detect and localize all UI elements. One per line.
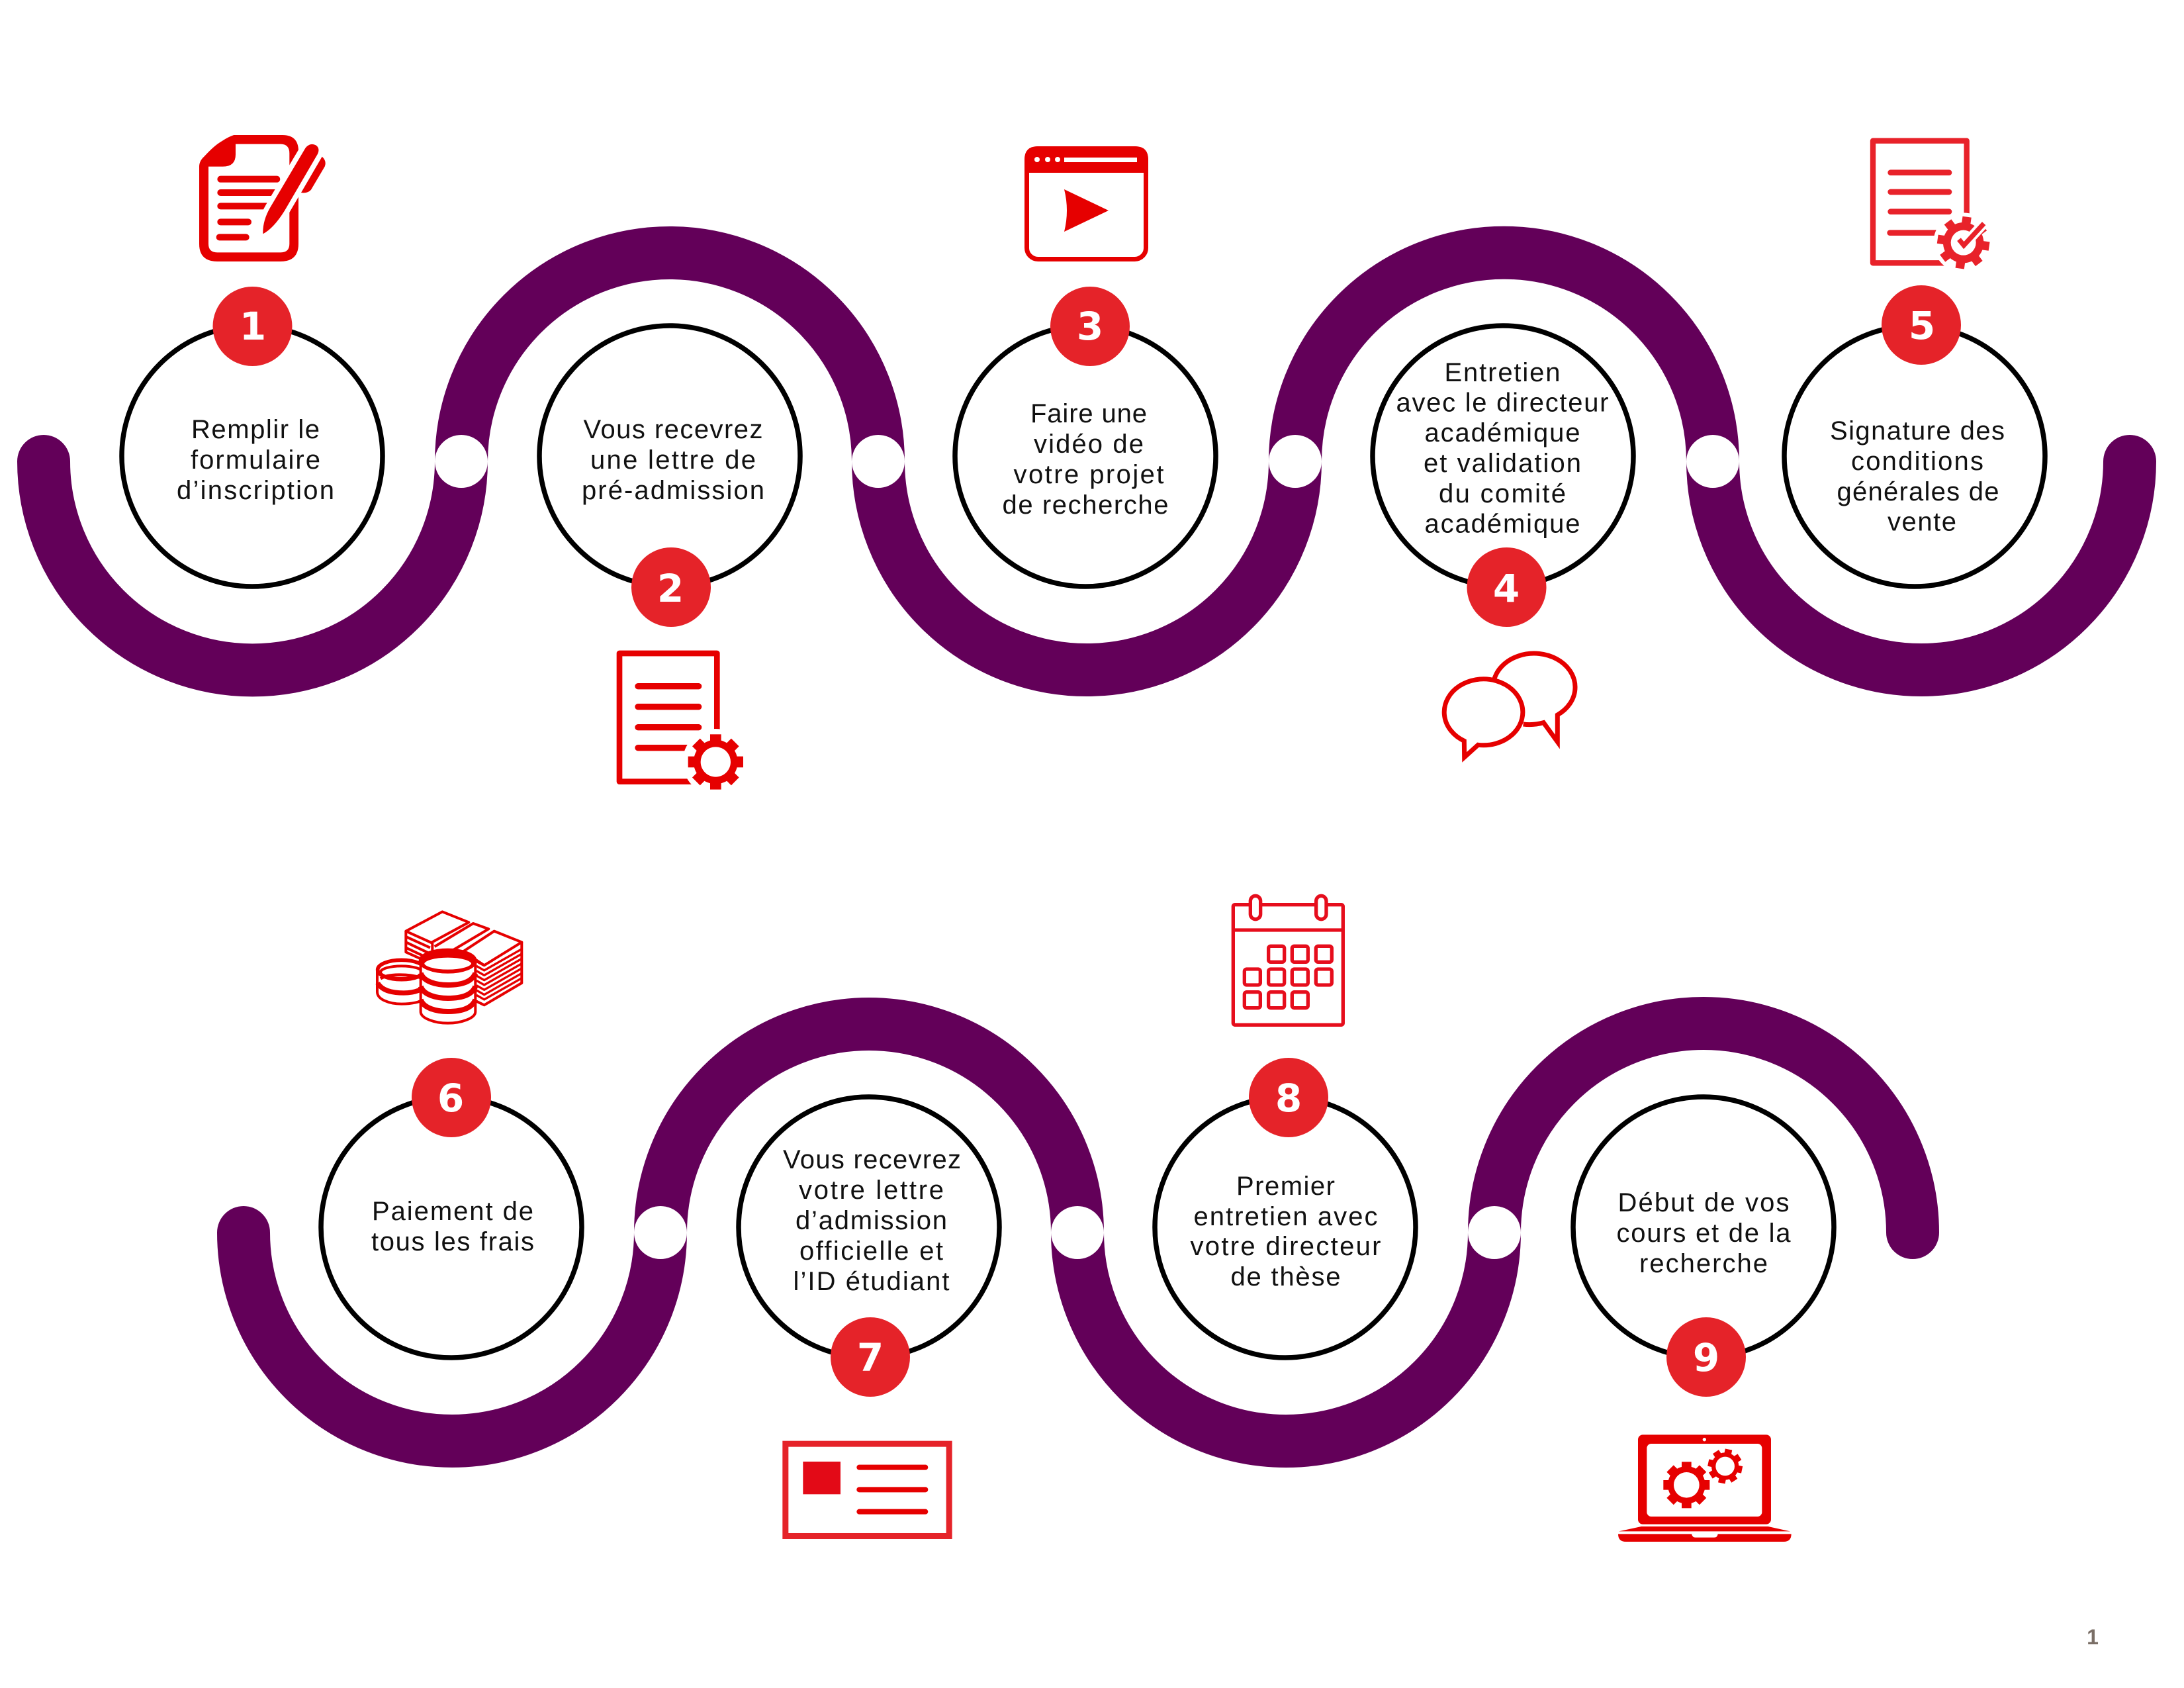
step 4 badge: 4	[1493, 566, 1520, 611]
page number: 1	[2087, 1625, 2099, 1649]
step 1 text: d’inscription	[177, 476, 334, 505]
step 2 text: Vous recevrez	[584, 415, 762, 444]
step 3 text	[1002, 399, 1169, 520]
step 9	[1573, 1097, 1834, 1542]
step 6 badge	[412, 1058, 491, 1137]
step 1 badge	[213, 287, 293, 366]
step 5 badge	[1882, 285, 1961, 365]
step 4 text: académique	[1424, 510, 1580, 539]
step 8 text: Premier	[1236, 1172, 1335, 1201]
step 5 text	[1830, 416, 2005, 536]
serpentine path: row 2	[244, 1023, 1913, 1441]
step 8 ring	[1155, 1097, 1416, 1358]
step 4 text: académique	[1424, 418, 1580, 447]
step 8 text: entretien avec	[1194, 1202, 1378, 1231]
step 1 text: Remplir le	[191, 415, 320, 444]
step 3 badge	[1050, 287, 1130, 366]
step 1 badge: 1	[240, 304, 266, 349]
step 8 text	[1190, 1172, 1381, 1291]
step 4 text: du comité	[1439, 479, 1566, 508]
step 9 badge	[1666, 1317, 1746, 1397]
step 4 text	[1396, 358, 1608, 539]
step 7 text: l’ID étudiant	[793, 1267, 949, 1296]
icon: calendar	[1233, 896, 1343, 1025]
step 7 text: Vous recevrez	[783, 1145, 961, 1174]
step 6 ring	[321, 1097, 582, 1358]
step 8 badge	[1249, 1058, 1328, 1137]
step 7	[739, 1097, 999, 1536]
icon: form with pen	[199, 135, 326, 261]
step 9 text	[1616, 1188, 1791, 1278]
step 7 badge	[831, 1317, 910, 1397]
step 4 text: Entretien	[1444, 358, 1561, 387]
step 6 text: Paiement de	[372, 1197, 533, 1226]
step 9 text: Début de vos	[1617, 1188, 1790, 1217]
step 3 text: votre projet	[1014, 460, 1163, 489]
step 1 ring	[122, 326, 383, 586]
step 5	[1784, 141, 2045, 586]
path connector nodes: row 2	[634, 1206, 1521, 1259]
step 4 ring	[1373, 326, 1633, 586]
step 3 ring	[955, 326, 1216, 586]
step 7 ring	[739, 1097, 999, 1358]
step 5 text: générales de	[1837, 477, 1999, 506]
step 8 text: de thèse	[1231, 1262, 1341, 1291]
step 7 text	[783, 1145, 961, 1296]
icon: document with gear and check	[1873, 141, 1993, 273]
step 4 text: et validation	[1424, 449, 1581, 478]
step 2 text	[582, 415, 764, 505]
step 7 text: d’admission	[796, 1206, 947, 1235]
step 5 ring	[1784, 326, 2045, 586]
step 1 text: formulaire	[191, 445, 320, 475]
step 4 badge	[1467, 547, 1546, 627]
step 3 text: vidéo de	[1034, 430, 1144, 459]
step 9 ring	[1573, 1097, 1834, 1358]
step 7 text: officielle et	[799, 1237, 943, 1266]
step 3 text: Faire une	[1030, 399, 1147, 428]
step 1 text	[177, 415, 334, 505]
icon: video player	[1024, 146, 1148, 259]
step 1	[122, 135, 383, 586]
step 7 text: votre lettre	[799, 1176, 944, 1205]
step 5 badge: 5	[1909, 303, 1935, 348]
step 5 text: conditions	[1851, 447, 1983, 476]
step 3 text: de recherche	[1002, 491, 1169, 520]
path connector nodes: row 1	[435, 435, 1739, 488]
step 4 text: avec le directeur	[1396, 388, 1608, 417]
step 6 text	[371, 1197, 534, 1256]
step 3	[955, 146, 1216, 586]
step 5 text: vente	[1888, 507, 1956, 536]
step 6 badge: 6	[437, 1076, 464, 1121]
serpentine path: row 1	[44, 253, 2130, 670]
icon: speech bubbles	[1444, 653, 1575, 757]
step 9 text: recherche	[1639, 1249, 1768, 1278]
step 3 badge: 3	[1077, 304, 1103, 349]
step 5 text: Signature des	[1830, 416, 2005, 445]
step 7 badge: 7	[857, 1335, 884, 1380]
step 2 text: une lettre de	[590, 445, 756, 475]
step 9 badge: 9	[1693, 1335, 1719, 1380]
step 2 text: pré-admission	[582, 476, 764, 505]
step 6	[321, 912, 582, 1358]
step 2 badge	[631, 547, 711, 627]
step 6 text: tous les frais	[371, 1227, 534, 1256]
icon: money stack and coins	[377, 912, 522, 1023]
step 8 badge: 8	[1275, 1076, 1302, 1121]
icon: document with gear	[619, 653, 749, 795]
step 2	[539, 326, 800, 795]
step 4	[1373, 326, 1633, 757]
step 9 text: cours et de la	[1616, 1219, 1791, 1248]
step 8 text: votre directeur	[1190, 1232, 1381, 1261]
step 2 badge: 2	[657, 566, 684, 611]
icon: ID card	[786, 1444, 949, 1536]
step 8	[1155, 896, 1416, 1358]
step 2 ring	[539, 326, 800, 586]
icon: laptop with gears	[1618, 1434, 1792, 1542]
